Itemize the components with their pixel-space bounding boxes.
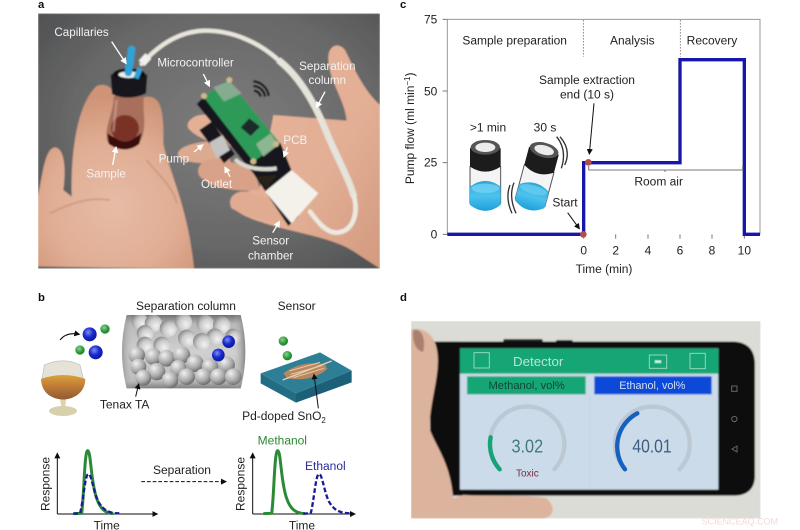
phone navigation icons (732, 386, 737, 452)
annotation: sample extraction end: Sample extraction (539, 73, 635, 87)
label separation column: Separation (299, 60, 356, 73)
phase label: analysis: Analysis (610, 33, 655, 47)
glass of spirit (41, 361, 85, 416)
label Pd-doped SnO2: 2 (321, 416, 326, 425)
white pointer arrows (112, 42, 325, 233)
ethanol gauge: 40.01 (632, 435, 672, 456)
phase label: sample preparation: Sample preparation (462, 33, 567, 47)
methanol gauge: Toxic (516, 468, 539, 479)
x axis ticks and numbers: 8 (709, 244, 716, 258)
device board stack (197, 97, 298, 226)
label Pd-doped SnO2: Pd-doped SnO (242, 409, 321, 423)
app title: Detector (513, 354, 564, 369)
phone photo (411, 321, 761, 519)
photo callouts (54, 26, 356, 262)
x axis ticks and numbers: 0 (580, 244, 587, 258)
arrow to Tenax (136, 384, 139, 397)
panel letter d: d (400, 292, 407, 304)
label 30 s: 30 s (534, 121, 556, 135)
y axis ticks and numbers: 0 (431, 227, 438, 241)
plot frame (447, 19, 760, 234)
arrow to start point (568, 213, 579, 229)
label microcontroller: Microcontroller (157, 57, 234, 70)
curved arrow from glass (60, 334, 79, 340)
label PCB: PCB (283, 134, 308, 147)
room air bracket (589, 166, 743, 172)
panel c: pump flow chart (400, 0, 760, 276)
separation column tube (142, 31, 278, 64)
separation arrow (141, 463, 226, 482)
left response plot (38, 451, 157, 530)
ethanol header: Ethanol, vol% (619, 380, 686, 392)
label separation column: column (309, 74, 346, 87)
shake motion marks (508, 137, 567, 213)
panel a: photo of the portable detector (38, 0, 380, 269)
label Tenax TA: Tenax TA (100, 398, 149, 412)
label sample: Sample (86, 167, 126, 180)
y axis title: −1 (403, 76, 412, 86)
upright vial (470, 140, 501, 211)
heading sensor: Sensor (278, 299, 316, 313)
label sensor chamber: Sensor (252, 235, 289, 248)
right response plot: Ethanol (305, 459, 346, 473)
methanol gauge (490, 407, 564, 479)
separation arrow: Separation (153, 463, 211, 477)
y axis title: Pump flow (ml min (403, 86, 417, 184)
flow step line (447, 60, 760, 234)
app toolbar icons (474, 353, 705, 369)
arrow to extraction point (589, 103, 594, 154)
sample vial (106, 49, 147, 149)
tilted shaken vial (513, 139, 561, 214)
separation column cylinder (122, 313, 245, 388)
methanol header: Methanol, vol% (489, 380, 565, 392)
y axis ticks and numbers: 25 (424, 156, 438, 170)
label capillaries: Capillaries (54, 26, 109, 39)
wifi symbol (253, 81, 269, 97)
panel letter b: b (38, 292, 45, 304)
vapour molecules (75, 324, 110, 359)
heading separation column: Separation column (136, 299, 236, 313)
phase dividers (583, 20, 680, 57)
methanol gauge: 3.02 (511, 435, 543, 456)
y axis ticks and numbers: 75 (424, 13, 438, 27)
right response plot: Response (234, 457, 248, 511)
x axis ticks and numbers: 4 (645, 244, 652, 258)
y axis title: ) (403, 72, 417, 76)
left response plot: Response (38, 457, 52, 511)
phase label: recovery: Recovery (687, 33, 737, 47)
ethanol gauge (615, 407, 690, 469)
x axis ticks and numbers: 10 (738, 244, 751, 258)
photo scene (38, 13, 380, 269)
arrow to sensing film (314, 374, 318, 408)
label pump: Pump (159, 153, 189, 166)
panel d: smartphone app photo (400, 292, 778, 527)
right response plot: Methanol (258, 434, 307, 448)
y axis ticks and numbers (424, 13, 447, 241)
label sensor chamber: chamber (248, 249, 293, 262)
start marker (580, 231, 587, 238)
watermark: SCIENCEAQ.COM (702, 517, 778, 527)
sensor molecules (279, 336, 292, 360)
sensor chip (261, 352, 352, 403)
x axis ticks and numbers: 2 (612, 244, 619, 258)
label over one minute: >1 min (470, 121, 506, 135)
annotation: sample extraction end: end (10 s) (560, 88, 614, 102)
right response plot (234, 434, 355, 530)
x axis ticks and numbers (580, 234, 751, 258)
x axis ticks and numbers: 6 (677, 244, 684, 258)
panel b: separation principle (38, 292, 355, 530)
y axis ticks and numbers: 50 (424, 84, 438, 98)
x axis title: Time (min) (576, 262, 632, 276)
annotation: start: Start (552, 196, 578, 210)
extraction end marker (585, 159, 592, 166)
label room air: Room air (634, 175, 683, 189)
label outlet: Outlet (201, 178, 233, 191)
